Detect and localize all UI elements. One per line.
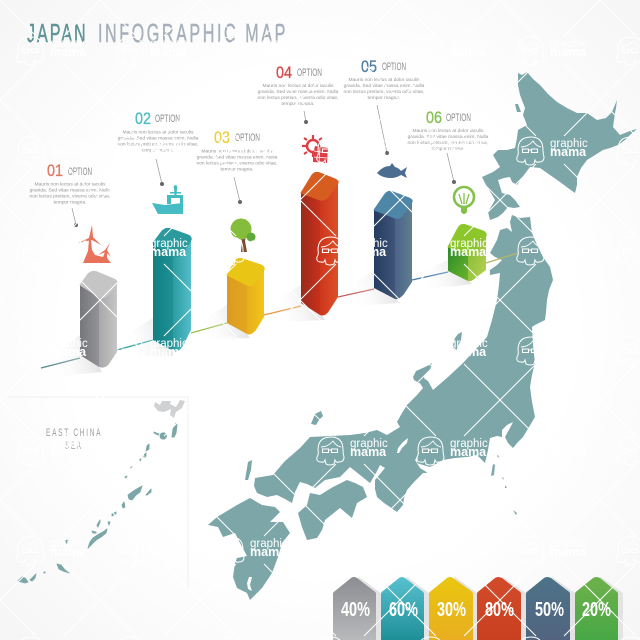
Izu islands <box>491 455 517 515</box>
watermark overlay: mama <box>250 145 287 159</box>
watermark overlay: mama <box>250 245 287 259</box>
option 02: Mauris non lectus at dolor iaculis <box>123 130 194 136</box>
watermark overlay: mama <box>350 145 387 159</box>
icon: fish <box>377 163 407 178</box>
watermark overlay: mama <box>50 245 87 259</box>
option 06: 06 <box>426 108 442 127</box>
watermark overlay: graphic <box>250 38 288 50</box>
watermark overlay: graphic <box>250 338 288 350</box>
tag 80% <box>477 577 526 640</box>
watermark overlay: graphic <box>350 38 388 50</box>
icon: solar panel and sun <box>302 135 328 163</box>
option 02: 02 <box>135 109 151 128</box>
watermark overlay: mama <box>450 145 487 159</box>
bar 2: teal <box>118 228 191 356</box>
option 04: non lectus pretium, viverra odio vitae, <box>257 95 339 101</box>
watermark overlay: mama <box>550 445 587 459</box>
watermark overlay: mama <box>550 45 587 59</box>
option 06: gravida. Sed vitae massa enim. Nulla <box>408 134 489 140</box>
Shikoku <box>298 480 367 540</box>
watermark overlay: graphic <box>450 538 488 550</box>
watermark overlay: mama <box>450 45 487 59</box>
option 01: 01 <box>47 161 63 180</box>
option 01: Mauris non lectus at dolor iaculis <box>35 182 106 188</box>
watermark overlay: mama <box>450 545 487 559</box>
option 01: non lectus pretium, viverra odio vitae, <box>29 194 111 200</box>
tag 30%: 30% <box>437 599 466 621</box>
watermark overlay: graphic <box>150 238 188 250</box>
tag 20%: 20% <box>582 599 611 621</box>
option 01: tempor magna. <box>54 200 86 206</box>
watermark overlay: mama <box>450 245 487 259</box>
watermark overlay: mama <box>250 545 287 559</box>
option 03: tempor magna. <box>221 166 253 172</box>
watermark overlay: mama <box>250 445 287 459</box>
Oki islands <box>311 411 323 425</box>
tag 20% <box>575 577 623 640</box>
watermark overlay: graphic <box>550 138 588 150</box>
watermark overlay: mama <box>350 445 387 459</box>
watermark overlay: mama <box>150 145 187 159</box>
tag 50% <box>526 577 575 640</box>
map of Japan <box>208 72 637 600</box>
bar 6: green <box>415 224 486 290</box>
Awaji <box>367 470 375 482</box>
option 06: non lectus pretium, viverra odio vitae, <box>407 140 489 146</box>
option 05: gravida. Sed vitae massa enim. Nulla <box>344 83 425 89</box>
watermark overlay: mama <box>150 345 187 359</box>
watermark overlay: graphic <box>350 338 388 350</box>
watermark overlay: mama <box>550 545 587 559</box>
option 02 <box>117 109 199 186</box>
watermark overlay: graphic <box>150 438 188 450</box>
option 03 <box>196 128 278 204</box>
Noto peninsula <box>413 363 432 384</box>
watermark overlay: graphic <box>350 438 388 450</box>
watermark overlay: mama <box>50 345 87 359</box>
watermark overlay: graphic <box>350 538 388 550</box>
sea label: SEA <box>65 439 83 451</box>
option 06: OPTION <box>446 112 471 124</box>
option 02: non lectus pretium, viverra odio vitae, <box>117 142 199 148</box>
bar 3: yellow <box>195 258 264 340</box>
bar 5: navy <box>343 191 412 306</box>
watermark overlay: mama <box>50 545 87 559</box>
watermark overlay: graphic <box>50 238 88 250</box>
option 06 <box>407 108 489 184</box>
watermark overlay: mama <box>50 145 87 159</box>
watermark overlay: graphic <box>50 138 88 150</box>
watermark overlay: graphic <box>250 438 288 450</box>
watermark overlay: graphic <box>250 238 288 250</box>
inset panel: East China Sea <box>8 397 188 590</box>
option 01 <box>29 161 111 227</box>
watermark overlay: graphic <box>150 338 188 350</box>
watermark overlay: mama <box>350 545 387 559</box>
option 06: tempor magna. <box>432 146 464 152</box>
watermark overlay: graphic <box>550 438 588 450</box>
option 04: 04 <box>276 63 292 82</box>
sea label: EAST CHINA <box>46 426 102 438</box>
Lake Biwa <box>397 438 408 453</box>
option 01: gravida. Sed vitae massa enim. Nulla <box>30 188 111 194</box>
watermark overlay: mama <box>150 45 187 59</box>
option 05: Mauris non lectus at dolor iaculis <box>349 77 420 83</box>
icon: ship <box>152 185 183 214</box>
option 05: 05 <box>361 57 377 76</box>
watermark overlay: graphic <box>350 238 388 250</box>
option 04: tempor magna. <box>282 101 314 107</box>
Hokkaido <box>482 72 637 220</box>
watermark overlay: graphic <box>450 38 488 50</box>
watermark overlay: graphic <box>50 438 88 450</box>
tag 80%: 80% <box>485 599 514 621</box>
option 03: OPTION <box>235 132 260 144</box>
watermark overlay: graphic <box>450 438 488 450</box>
watermark overlay: mama <box>150 245 187 259</box>
Kagoshima bay <box>247 577 252 591</box>
tag 50%: 50% <box>535 599 564 621</box>
option 05 <box>343 57 425 155</box>
option 05: non lectus pretium, viverra odio vitae, <box>343 89 425 95</box>
watermark overlay: graphic <box>150 538 188 550</box>
watermark overlay: mama <box>250 45 287 59</box>
tag 60% <box>381 577 429 640</box>
watermark overlay: graphic <box>450 138 488 150</box>
icon: tree <box>230 218 256 252</box>
option 03: non lectus pretium, viverra odio vitae, <box>196 160 278 166</box>
watermark overlay: graphic <box>550 338 588 350</box>
option 01: OPTION <box>68 166 92 178</box>
option 03: 03 <box>214 128 230 147</box>
option 03: gravida. Sed vitae massa enim. Nulla <box>197 154 278 160</box>
Rishiri <box>515 104 521 112</box>
option 04: Mauris non lectus at dolor iaculis <box>263 83 334 89</box>
watermark overlay: graphic <box>250 138 288 150</box>
watermark overlay: mama <box>550 145 587 159</box>
watermark overlay: graphic <box>550 238 588 250</box>
watermark overlay: mama <box>450 445 487 459</box>
watermark overlay: graphic <box>150 138 188 150</box>
watermark overlay: graphic <box>50 538 88 550</box>
tag 40% <box>333 577 381 640</box>
title: JAPAN <box>27 18 88 48</box>
inset tip of Kyushu <box>154 400 185 418</box>
watermark overlay: mama <box>150 545 187 559</box>
watermark overlay: graphic <box>450 338 488 350</box>
watermark overlay: graphic <box>50 38 88 50</box>
title: INFOGRAPHIC MAP <box>98 18 288 48</box>
bar 4: red <box>268 172 338 322</box>
watermark overlay: graphic <box>150 38 188 50</box>
watermark overlay: graphic <box>50 338 88 350</box>
bar 1: gray <box>45 271 117 376</box>
option 02: tempor magna. <box>142 148 174 154</box>
option 05: OPTION <box>382 61 406 73</box>
option 02: gravida. Sed vitae massa enim. Nulla <box>118 136 199 142</box>
option 04 <box>257 63 339 124</box>
watermark overlay: graphic <box>450 238 488 250</box>
watermark overlay: graphic <box>250 538 288 550</box>
tag 40%: 40% <box>341 599 370 621</box>
tag 60%: 60% <box>389 599 418 621</box>
percent tags <box>333 577 623 640</box>
option 02: OPTION <box>155 113 180 125</box>
option 04: gravida. Sed vitae massa enim. Nulla <box>258 89 339 95</box>
watermark overlay: graphic <box>550 538 588 550</box>
Tsushima <box>245 460 252 480</box>
icon: wind turbines <box>78 225 111 263</box>
sea label <box>46 426 102 451</box>
watermark overlay: mama <box>450 345 487 359</box>
tag 30% <box>429 577 477 640</box>
Ryukyu islands <box>18 423 177 583</box>
watermark overlay: mama <box>350 45 387 59</box>
option 03: Mauris non lectus at dolor iaculis <box>202 148 273 154</box>
watermark overlay: mama <box>550 345 587 359</box>
connector line <box>41 253 518 368</box>
Kyushu <box>208 498 290 600</box>
watermark overlay: mama <box>350 245 387 259</box>
watermark overlay: mama <box>350 345 387 359</box>
Sado island <box>453 332 462 351</box>
watermark overlay: mama <box>250 345 287 359</box>
watermark overlay: mama <box>50 45 87 59</box>
watermark overlay: graphic <box>350 138 388 150</box>
Honshu <box>254 215 553 512</box>
icon: light bulb <box>454 187 474 214</box>
watermark overlay: mama <box>150 445 187 459</box>
option 06: Mauris non lectus at dolor iaculis <box>413 128 484 134</box>
option 05: tempor magna. <box>368 95 400 101</box>
watermark overlay: mama <box>50 445 87 459</box>
watermark overlay: mama <box>550 245 587 259</box>
option 04: OPTION <box>297 67 322 79</box>
watermark overlay: graphic <box>550 38 588 50</box>
